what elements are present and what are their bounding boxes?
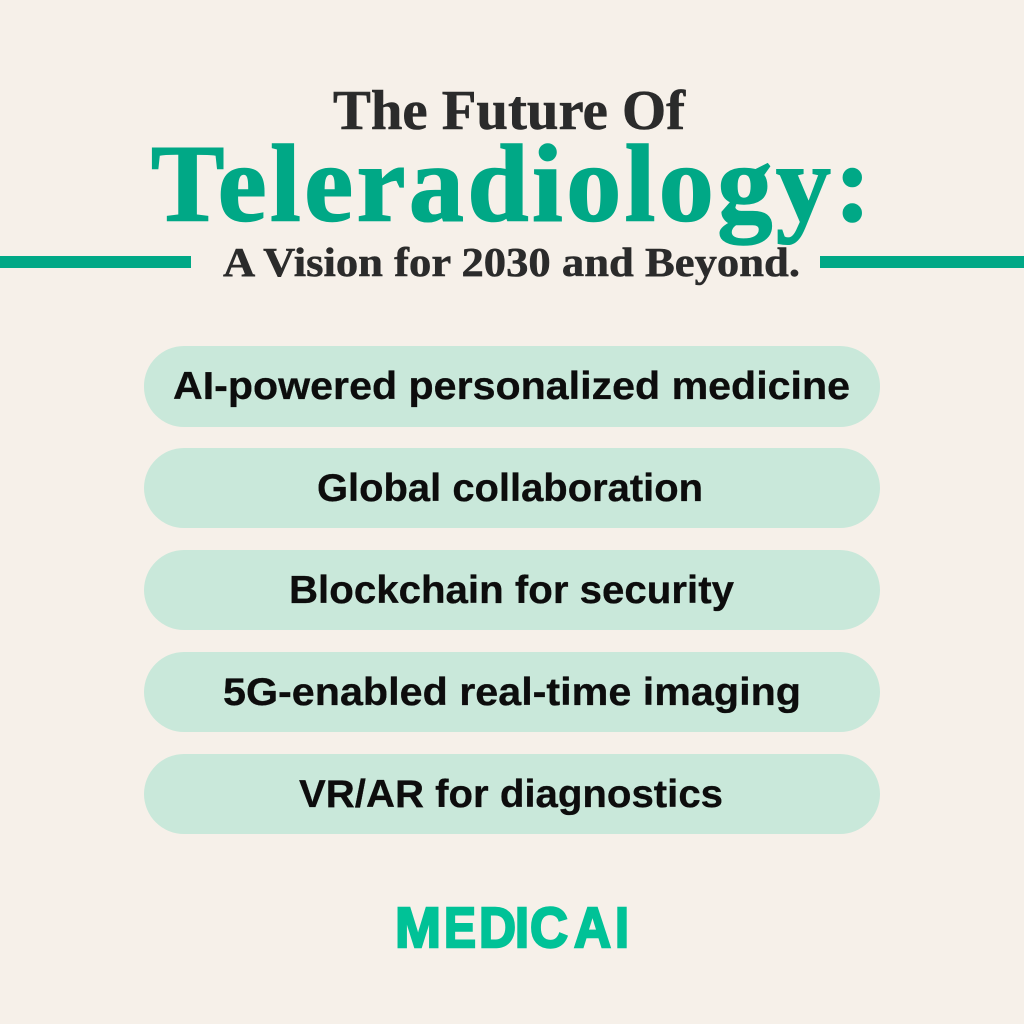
left rule (0, 256, 191, 268)
list item: 5G-enabled real-time imaging (144, 652, 880, 732)
list item: Blockchain for security (144, 550, 880, 630)
list item: Global collaboration (144, 448, 880, 528)
logo: MEDICAI: I (515, 896, 529, 960)
list item: Global collaboration: Global collaboration (317, 467, 703, 510)
list item: VR/AR for diagnostics (144, 754, 880, 834)
logo: MEDICAI: M (395, 896, 441, 960)
title: The Future Of: The Future Of (333, 80, 686, 142)
right rule (820, 256, 1024, 268)
logo: MEDICAI: D (479, 896, 516, 960)
list item: 5G-enabled real-time imaging: 5G-enabled real-time imaging (223, 671, 801, 714)
subtitle: A Vision for 2030 and Beyond. (223, 239, 800, 285)
logo: MEDICAI: C (530, 896, 568, 960)
list item: Blockchain for security: Blockchain for security (289, 569, 734, 612)
logo: MEDICAI: A (574, 896, 611, 960)
logo: MEDICAI: I (615, 896, 629, 960)
title: Teleradiology: Teleradiology: (151, 122, 871, 244)
logo: MEDICAI: E (444, 896, 476, 960)
list item: AI-powered personalized medicine (144, 346, 880, 427)
list item: VR/AR for diagnostics: VR/AR for diagnostics (299, 773, 723, 816)
list item: AI-powered personalized medicine: AI-powered personalized medicine (173, 365, 850, 408)
